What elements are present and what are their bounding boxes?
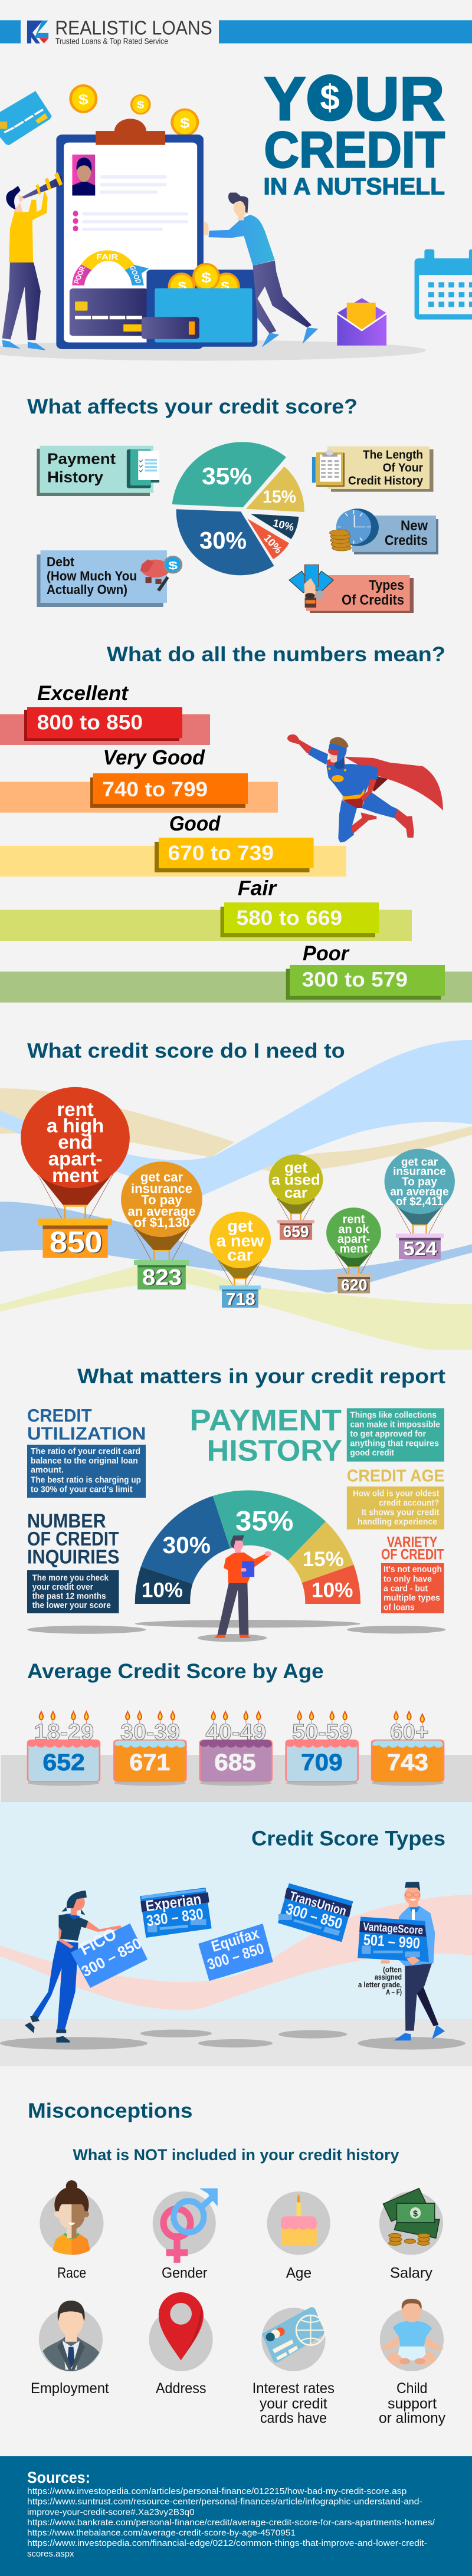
- heading: What affects your credit score?: [27, 395, 358, 418]
- background waves: [0, 1040, 472, 1350]
- card: Experian: Experian: [145, 1890, 202, 1915]
- title: $: [320, 78, 340, 117]
- icon: salary: $: [413, 2209, 418, 2219]
- age labels: 18-29: [34, 1720, 94, 1745]
- balloon: 850: a high: [47, 1114, 104, 1136]
- label: new credits: New: [401, 518, 428, 534]
- heading: What do all the numbers mean?: [107, 643, 445, 666]
- card: Experian: 330 – 830: [145, 1905, 204, 1929]
- text block: payment history: HISTORY: [206, 1434, 342, 1468]
- score band: poor: [0, 942, 472, 1003]
- balloon: 823: [121, 1161, 202, 1290]
- heading: Misconceptions: [28, 2099, 192, 2122]
- icon: race: [40, 2180, 104, 2255]
- note: letter grade: a letter grade,: [358, 1980, 402, 1989]
- age labels: 50-59: [292, 1720, 352, 1745]
- score band: very good: [0, 746, 278, 813]
- age labels: [34, 1720, 428, 1745]
- ground shadow: [0, 340, 426, 360]
- icon: calendar: [415, 249, 472, 320]
- background wave: [0, 1895, 472, 2010]
- panel: what do all the numbers mean: [0, 643, 472, 1003]
- score band: excellent: 800 to 850: [37, 711, 143, 734]
- average scores: 652: [42, 1750, 85, 1776]
- labels: Race: [57, 2265, 86, 2282]
- text block: variety of credit: VARIETY: [387, 1534, 438, 1550]
- note: letter grade: (often: [383, 1965, 402, 1974]
- icon: salary: [379, 2188, 443, 2255]
- balloon: 850: 850: [50, 1225, 103, 1259]
- balloon: 659: [269, 1154, 323, 1241]
- balloon: 718: get: [227, 1217, 253, 1236]
- subheading: What is NOT included in your credit history: [73, 2146, 399, 2164]
- balloon: 718: a new: [217, 1232, 264, 1251]
- balloon: 850: rent: [57, 1098, 94, 1120]
- mini gauge: POOR: [73, 265, 87, 284]
- score band: excellent: [0, 682, 210, 745]
- score band: fair: 580 to 669: [236, 907, 342, 930]
- source links: https://www.suntrust.com/resource-center/personal-finances/article/infographic-understand-and-: [27, 2497, 422, 2507]
- average scores: 743: [387, 1750, 428, 1776]
- label: debt: Debt: [47, 554, 75, 569]
- logo wordmark: REALISTIC LOANS: [55, 17, 212, 38]
- text block: payment history: PAYMENT: [189, 1403, 342, 1437]
- balloon: 524: an average: [390, 1186, 449, 1198]
- heading: Credit Score Types: [251, 1827, 445, 1850]
- text block: number of credit inquiries: OF CREDIT: [27, 1528, 119, 1550]
- balloon: 659: car: [284, 1184, 307, 1202]
- balloon: 850: [21, 1087, 130, 1259]
- text block: credit utilization: CREDIT: [27, 1405, 92, 1426]
- score band: good: Good: [169, 812, 221, 835]
- pie chart: [172, 442, 304, 575]
- icon: address: [149, 2292, 213, 2371]
- header: logo band: [0, 17, 472, 46]
- text block: credit age: It shows your credit: [362, 1508, 440, 1518]
- ground shadows: [0, 2030, 466, 2050]
- wallet with coins: $: [178, 279, 186, 293]
- icon: clipboard: [312, 449, 345, 487]
- text block: number of credit inquiries: [27, 1509, 119, 1613]
- labels: support: [388, 2395, 437, 2412]
- semicircle gauge chart: 30%: [163, 1533, 211, 1558]
- icon: gender: [153, 2188, 218, 2263]
- balloon: 823: of $1,130: [134, 1215, 189, 1230]
- icon: document: [127, 449, 159, 488]
- icon: flying superhero: [287, 734, 443, 842]
- title: CREDIT: [264, 122, 445, 179]
- semicircle gauge chart: 10%: [142, 1579, 183, 1602]
- source links: https://www.thebalance.com/average-credit-score-by-age-4570951: [27, 2528, 296, 2538]
- card: TransUnion: 300 – 850: [284, 1899, 345, 1932]
- label: debt: (How Much You: [47, 569, 137, 583]
- text block: payment history: Things like collections: [350, 1410, 437, 1420]
- balloon: 524: To pay: [402, 1176, 437, 1188]
- icon: child: [380, 2299, 444, 2371]
- panel: what credit score do I need: [0, 1039, 472, 1350]
- balloon: 620: an ok: [338, 1223, 369, 1236]
- panel: what affects your credit score: [27, 395, 438, 613]
- note: letter grade: A – F): [386, 1988, 402, 1997]
- balloon: 659: a used: [271, 1171, 320, 1189]
- labels: Salary: [390, 2265, 432, 2282]
- title: YOUR: [264, 65, 445, 133]
- logo tagline: Trusted Loans & Top Rated Service: [55, 37, 168, 46]
- labels: your credit: [260, 2395, 327, 2412]
- person pushing clipboard: [204, 193, 318, 347]
- pie chart: 10%: [272, 517, 295, 533]
- panel: what matters in your credit report: [27, 1365, 445, 1642]
- sources heading: Sources:: [27, 2469, 90, 2486]
- average scores: 685: [214, 1750, 256, 1776]
- text block: credit age: How old is your oldest: [353, 1489, 440, 1499]
- balloon: 823: an average: [128, 1204, 195, 1219]
- text block: credit age: handling experience: [358, 1518, 437, 1527]
- text block: number of credit inquiries: The more you check: [32, 1573, 109, 1583]
- balloon: 850: ment: [52, 1164, 99, 1186]
- age labels: 60+: [390, 1720, 428, 1745]
- text block: number of credit inquiries: your credit over: [32, 1583, 93, 1592]
- balloon: 823: insurance: [131, 1181, 192, 1196]
- man figure with VantageScore card: 501 – 990: [363, 1931, 421, 1952]
- label: types of credits: [289, 565, 414, 613]
- panel: misconceptions: [28, 2099, 445, 2427]
- balloon: 620: [326, 1207, 381, 1294]
- mini gauge: FAIR: [96, 253, 119, 262]
- card: FICO: FICO: [77, 1925, 120, 1959]
- panel: average credit score by age: [1, 1660, 472, 1802]
- icon: interest rates card: [261, 2307, 326, 2371]
- label: payment history: [37, 446, 159, 496]
- icon: coins: $: [78, 91, 88, 107]
- score band: excellent: Excellent: [37, 682, 129, 705]
- cake 40-49: [200, 1740, 272, 1781]
- pie chart: 30%: [199, 527, 247, 554]
- icon: Realistic Loans logo mark: [27, 21, 49, 43]
- text block: number of credit inquiries: the lower your score: [32, 1601, 111, 1610]
- title: [263, 65, 445, 199]
- title: IN A NUTSHELL: [263, 173, 445, 199]
- note: letter grade: assigned: [375, 1973, 402, 1981]
- id photo: [72, 155, 95, 195]
- text block: variety of credit: of loans: [384, 1603, 415, 1612]
- text block: credit age: credit account?: [379, 1499, 440, 1508]
- source links: improve-your-credit-score#.Xa23vy2B3q0: [27, 2508, 195, 2518]
- source links: [27, 2486, 435, 2559]
- label: length of credit history: Of Your: [383, 462, 423, 475]
- mini gauge: GOOD: [127, 265, 142, 284]
- balloon: 850: apart-: [48, 1147, 102, 1169]
- text block: credit utilization: The ratio of your credit card: [31, 1447, 140, 1456]
- icon: employment: [39, 2301, 103, 2371]
- icon: clock and coins: [330, 508, 379, 551]
- card: TransUnion: [278, 1883, 353, 1942]
- cake 30-39: [114, 1740, 186, 1781]
- balloon: 659: 659: [283, 1223, 309, 1241]
- score band: poor: Poor: [303, 942, 350, 965]
- balloon: 850: end: [58, 1131, 93, 1153]
- icon: coins: $: [137, 100, 145, 111]
- balloon: 659: get: [284, 1159, 307, 1176]
- heading: Average Credit Score by Age: [27, 1660, 323, 1683]
- label: length of credit history: The Length: [363, 449, 423, 462]
- panel: sources footer: [0, 2456, 472, 2576]
- label: new credits: Credits: [385, 533, 428, 549]
- source links: https://www.investopedia.com/articles/personal-finance/012215/how-bad-my-credit-score.asp: [27, 2486, 407, 2496]
- balloon: 620: rent: [343, 1213, 365, 1226]
- label: length of credit history: [312, 447, 433, 492]
- card: Equifax: 300 – 850: [205, 1940, 266, 1973]
- person with tablet: [214, 1535, 271, 1638]
- dark credit card: [70, 288, 149, 336]
- balloon: 524: of $2,411: [396, 1196, 444, 1208]
- balloon: 718: [209, 1212, 271, 1309]
- text block: number of credit inquiries: NUMBER: [27, 1509, 106, 1531]
- semicircle gauge chart: 35%: [235, 1505, 293, 1536]
- source links: scores.aspx: [27, 2549, 74, 2559]
- labels: cards have: [260, 2410, 327, 2427]
- panel background: [0, 1802, 472, 2019]
- labels: Child: [396, 2380, 427, 2397]
- source links: https://www.bankrate.com/personal-finance/credit/average-credit-score-for-cars-apartments-homes/: [27, 2518, 435, 2528]
- labels: Interest rates: [253, 2380, 335, 2397]
- icon: piggy bank and magnifier: [140, 556, 181, 592]
- ground shadows: [27, 1620, 445, 1642]
- text block: credit utilization: amount.: [31, 1466, 64, 1475]
- source links: https://www.investopedia.com/financial-edge/0212/common-things-that-improve-and-lower-credit-: [27, 2538, 427, 2548]
- wallet with coins: $: [221, 279, 230, 293]
- text block: payment history: anything that requires: [350, 1439, 439, 1448]
- semicircle gauge chart: [135, 1491, 360, 1604]
- pie chart: 15%: [263, 487, 296, 507]
- labels: Address: [156, 2380, 206, 2397]
- average scores: 671: [129, 1750, 170, 1776]
- text block: payment history: [189, 1403, 444, 1468]
- text block: credit utilization: UTILIZATION: [27, 1423, 146, 1444]
- balloon: 524: insurance: [393, 1166, 446, 1178]
- score band: fair: [0, 877, 412, 941]
- wallet with coins: [142, 263, 257, 347]
- heading: What matters in your credit report: [77, 1365, 445, 1388]
- balloon: 823: 823: [142, 1265, 182, 1290]
- pie chart: 35%: [202, 462, 252, 490]
- text block: credit utilization: The best ratio is charging up: [31, 1475, 141, 1485]
- cake 18-29: [28, 1740, 100, 1781]
- candles: [39, 1710, 425, 1726]
- text block: variety of credit: OF CREDIT: [381, 1546, 444, 1563]
- heading: What credit score do I need to: [27, 1039, 345, 1062]
- icon: coins: $: [180, 115, 190, 131]
- label: payment history: Payment: [47, 450, 116, 468]
- text block: variety of credit: It's not enough: [384, 1565, 442, 1574]
- text block: payment history: good credit: [350, 1448, 394, 1458]
- icon: age: [267, 2191, 330, 2255]
- card: Equifax: [198, 1924, 273, 1981]
- score band: good: 670 to 739: [168, 842, 274, 865]
- pie chart: 10%: [261, 532, 284, 556]
- balloon: 524: 524: [404, 1238, 437, 1259]
- mini gauge: [72, 250, 149, 286]
- balloon: 524: [385, 1148, 455, 1259]
- card: FICO: 300 – 850: [78, 1934, 145, 1980]
- balloon: 823: get car: [140, 1170, 183, 1184]
- score band: fair: Fair: [238, 877, 277, 900]
- text block: variety of credit: [381, 1534, 444, 1613]
- panel: credit score types: [0, 1802, 472, 2066]
- icon: hand with banknotes: [289, 565, 333, 608]
- score band: very good: Very Good: [103, 746, 205, 769]
- age labels: 30-39: [120, 1720, 180, 1745]
- balloon: 718: 718: [226, 1290, 255, 1309]
- clipboard: [56, 119, 204, 349]
- card: Experian: [140, 1888, 212, 1938]
- text block: credit utilization: balance to the original loan: [31, 1456, 138, 1466]
- semicircle gauge chart: 15%: [303, 1548, 344, 1571]
- text block: payment history: can make it impossible: [350, 1420, 440, 1429]
- text block: credit age: [347, 1467, 445, 1530]
- balloon: 620: apart-: [337, 1233, 370, 1246]
- person with telescope: [2, 172, 63, 350]
- score band: good: [0, 812, 346, 877]
- balloon: 620: ment: [340, 1243, 368, 1256]
- man figure with VantageScore card: [358, 1882, 445, 2040]
- labels: or alimony: [379, 2410, 445, 2427]
- cake 60+: [372, 1740, 444, 1781]
- labels: Employment: [31, 2380, 109, 2397]
- text block: number of credit inquiries: INQUIRIES: [27, 1546, 119, 1568]
- label: debt: Actually Own): [47, 582, 127, 597]
- text block: credit age: CREDIT AGE: [347, 1467, 445, 1486]
- cake illustrations: [27, 1710, 444, 1786]
- score band: very good: 740 to 799: [103, 778, 208, 801]
- label: length of credit history: Credit History: [348, 475, 424, 488]
- card: TransUnion: TransUnion: [288, 1888, 348, 1918]
- label: payment history: History: [47, 468, 104, 486]
- text block: variety of credit: a card - but: [384, 1584, 428, 1594]
- text block: number of credit inquiries: the past 12 months: [32, 1592, 106, 1602]
- woman figure: [25, 1891, 122, 2043]
- semicircle gauge chart: 10%: [312, 1579, 353, 1602]
- text block: variety of credit: multiple types: [384, 1593, 440, 1603]
- wallet with coins: $: [201, 269, 212, 286]
- icon: coins: [69, 84, 199, 136]
- icon: piggy bank and magnifier: $: [168, 560, 178, 572]
- average scores: [42, 1750, 428, 1776]
- score band: poor: 300 to 579: [302, 969, 408, 992]
- gray floor band: [1, 1755, 472, 1802]
- age labels: 40-49: [205, 1720, 266, 1745]
- average scores: 709: [301, 1750, 343, 1776]
- label: types of credits: Types: [369, 577, 404, 593]
- hero illustration: [0, 84, 472, 360]
- icon: blue credit card: [0, 91, 52, 145]
- labels: [31, 2265, 445, 2427]
- balloon: 718: car: [227, 1246, 253, 1265]
- icon: envelope: [337, 298, 386, 346]
- note: letter grade: [358, 1965, 402, 1997]
- cake 50-59: [286, 1740, 358, 1781]
- icons row group: [39, 2180, 444, 2371]
- balloon: 524: get car: [401, 1156, 438, 1169]
- label: debt: [37, 550, 181, 607]
- card: Equifax: Equifax: [209, 1924, 261, 1955]
- text block: credit utilization: to 30% of your card's limit: [31, 1485, 133, 1494]
- label: types of credits: Of Credits: [342, 592, 404, 608]
- text block: credit utilization: [27, 1405, 146, 1498]
- labels: Age: [286, 2265, 312, 2282]
- text block: payment history: to get approved for: [350, 1429, 426, 1439]
- balloon: 823: To pay: [141, 1192, 182, 1207]
- card: FICO: [71, 1924, 148, 1988]
- label: new credits: [330, 508, 438, 554]
- text block: variety of credit: to only have: [384, 1575, 432, 1584]
- labels: Gender: [162, 2265, 208, 2282]
- balloon: 620: 620: [341, 1276, 367, 1294]
- man figure with VantageScore card: VantageScore: [363, 1921, 424, 1937]
